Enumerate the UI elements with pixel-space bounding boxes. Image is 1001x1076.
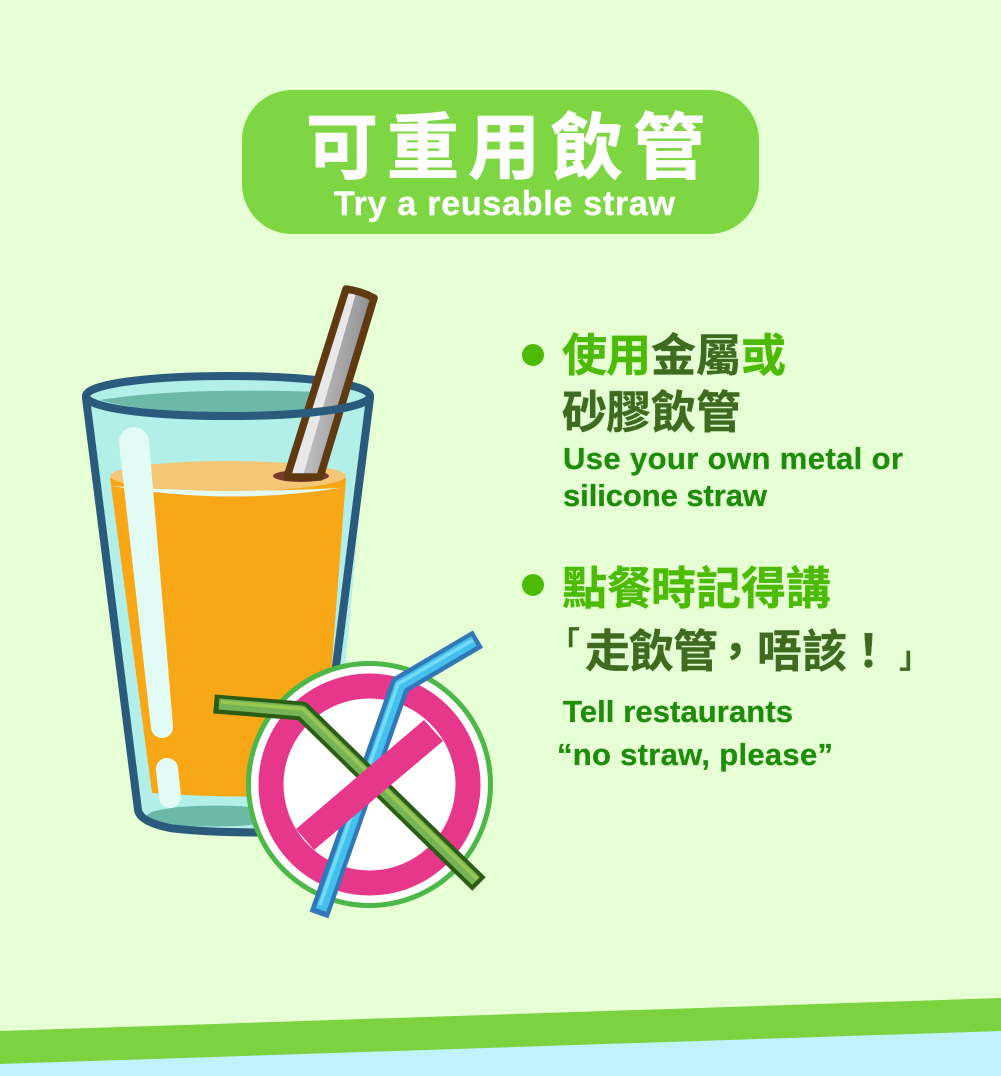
item 1 English line 2: silicone straw xyxy=(563,478,768,513)
green straw xyxy=(214,702,479,884)
title badge xyxy=(242,90,759,234)
item 2 opening bracket: 「 xyxy=(549,626,580,661)
blue straw xyxy=(319,639,478,915)
item 2 English line 2: “no straw, please” xyxy=(557,737,833,772)
sign slash xyxy=(296,720,443,850)
bullet dot xyxy=(522,574,544,596)
illustration: glass of juice xyxy=(86,289,374,832)
item 2 closing bracket: 」 xyxy=(899,640,930,675)
straw hole xyxy=(273,470,329,482)
glass back rim fill xyxy=(86,376,370,416)
item 2 Chinese line 2: 走飲管，唔該！ xyxy=(585,626,891,677)
glass outline xyxy=(86,398,370,832)
glass rim back xyxy=(86,376,370,396)
glass body xyxy=(86,398,370,831)
icon: no straws sign xyxy=(214,639,490,915)
item 1 Chinese line 1: 使用金屬或 xyxy=(562,330,786,381)
glass base xyxy=(147,806,283,826)
glass highlight short xyxy=(156,758,181,808)
footer band xyxy=(0,998,1001,1076)
juice xyxy=(110,478,346,797)
juice surface highlight xyxy=(112,486,340,497)
juice surface xyxy=(110,461,346,491)
title: Chinese heading: 可重用飲管 xyxy=(306,109,705,189)
bullet list item 1 xyxy=(522,330,903,513)
sign pink ring xyxy=(271,686,468,883)
glass rim front xyxy=(86,396,370,416)
glass inner liquid xyxy=(100,391,322,413)
item 1 Chinese line 2: 砂膠飲管 xyxy=(562,387,741,438)
item 2 English line 1: Tell restaurants xyxy=(563,694,793,729)
glass highlight long xyxy=(119,427,173,738)
sign outer ring xyxy=(248,664,490,906)
item 2 Chinese line 1: 點餐時記得講 xyxy=(562,563,831,614)
title: English subtitle: Try a reusable straw xyxy=(334,185,676,223)
metal straw xyxy=(287,289,374,477)
bullet dot xyxy=(522,344,544,366)
item 1 English line 1: Use your own metal or xyxy=(563,441,903,476)
bullet list item 2 xyxy=(522,563,930,772)
